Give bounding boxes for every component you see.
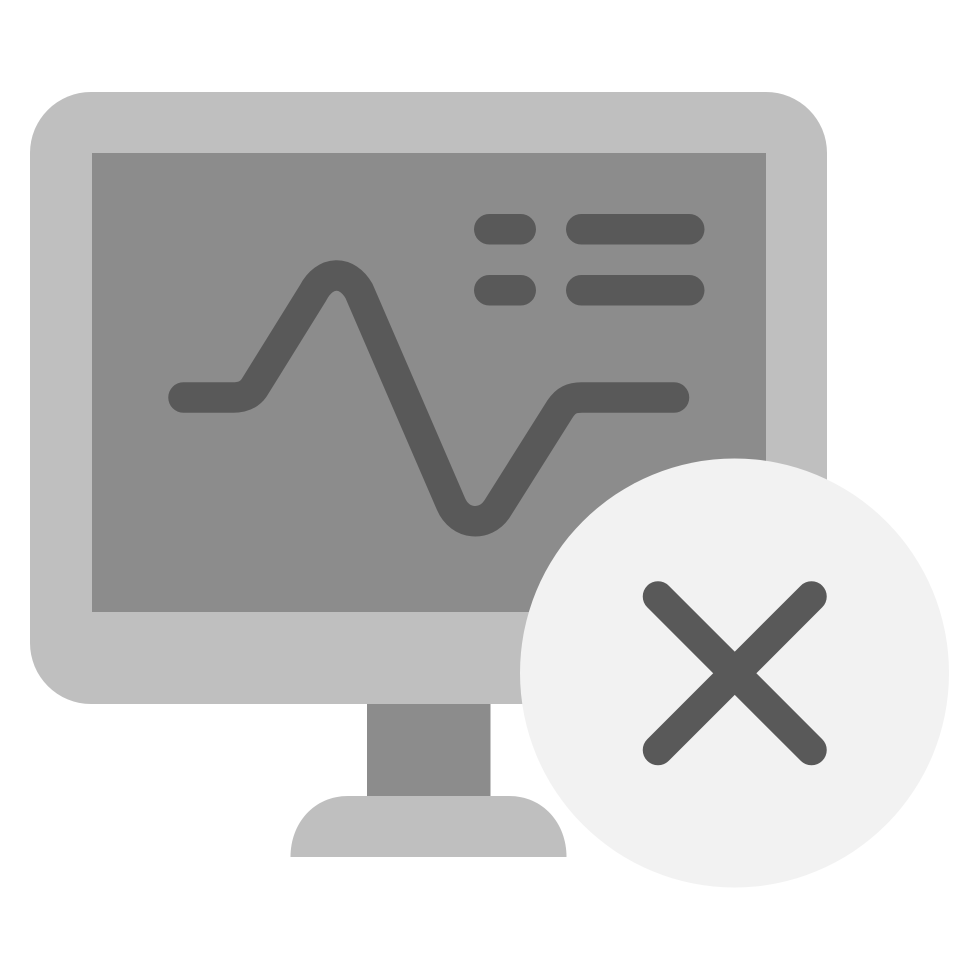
monitor screen	[92, 153, 766, 612]
monitor stand base	[290, 796, 566, 857]
error badge circle	[520, 458, 949, 888]
legend lines	[474, 214, 704, 306]
icon: X mark	[658, 596, 812, 750]
monitor bezel	[30, 92, 827, 704]
chart line	[184, 275, 674, 521]
monitor stand neck	[367, 700, 490, 800]
